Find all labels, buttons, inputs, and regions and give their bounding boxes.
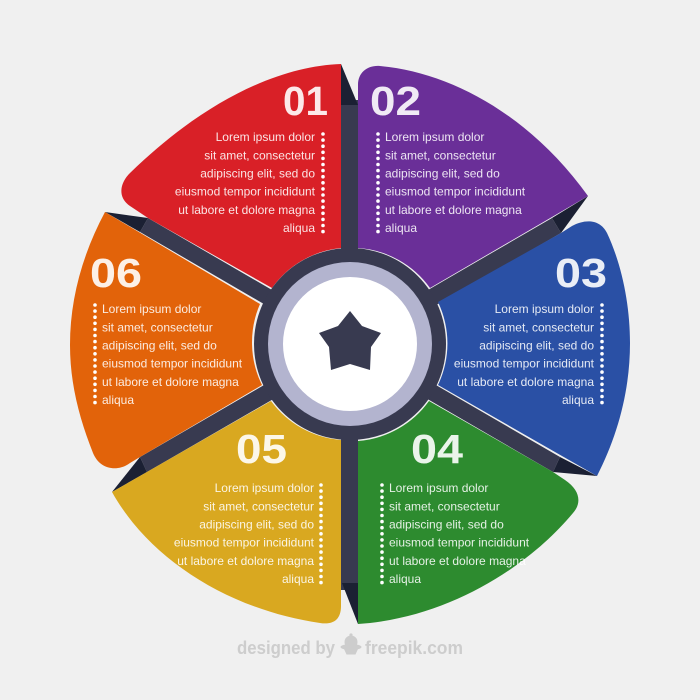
centre hub	[254, 248, 446, 440]
segment shape 02	[358, 66, 588, 288]
text block 06: aliqua	[102, 393, 134, 407]
text block 05: sit amet, consectetur	[203, 499, 314, 513]
text block 04: adipiscing elit, sed do	[389, 518, 504, 532]
text block 02: ut labore et dolore magna	[385, 203, 522, 217]
text block 05: aliqua	[282, 572, 314, 586]
dotted line 04	[380, 485, 384, 584]
segment shape 04	[358, 401, 578, 624]
footer: freepik credit: freepik.com	[365, 638, 463, 658]
text block 03: eiusmod tempor incididunt	[454, 357, 595, 371]
number 01: 01	[283, 78, 328, 124]
text block 05: ut labore et dolore magna	[177, 554, 314, 568]
text block 04: eiusmod tempor incididunt	[389, 536, 530, 550]
segment shape 03	[438, 221, 630, 476]
text block 06: sit amet, consectetur	[102, 320, 213, 334]
panel: 04 green	[358, 401, 578, 624]
text block 04: ut labore et dolore magna	[389, 554, 526, 568]
number 05: 05	[236, 426, 287, 472]
panel: 05 yellow	[112, 401, 341, 623]
text block 03: ut labore et dolore magna	[457, 375, 594, 389]
dotted line 06	[93, 305, 97, 404]
panel: 06 orange	[70, 212, 262, 468]
number 04: 04	[411, 426, 463, 472]
footer: freepik credit	[237, 633, 463, 658]
text block 03: sit amet, consectetur	[483, 320, 594, 334]
text block 04: sit amet, consectetur	[389, 499, 500, 513]
dotted line 01	[321, 134, 325, 233]
text block 06: Lorem ipsum dolor	[102, 302, 201, 316]
text block 03: Lorem ipsum dolor	[495, 302, 594, 316]
text block 05: adipiscing elit, sed do	[199, 518, 314, 532]
number 06: 06	[90, 250, 142, 296]
text block 04: aliqua	[389, 572, 421, 586]
text block 01: sit amet, consectetur	[204, 148, 315, 162]
segment shape 01	[121, 64, 341, 288]
icon: freepik mascot	[340, 633, 362, 654]
text block 04: Lorem ipsum dolor	[389, 481, 488, 495]
text block 01: Lorem ipsum dolor	[216, 130, 315, 144]
panel: 02 purple	[358, 66, 588, 288]
number 03: 03	[555, 250, 607, 296]
text block 06: adipiscing elit, sed do	[102, 338, 217, 352]
text block 02: adipiscing elit, sed do	[385, 166, 500, 180]
dotted line 02	[376, 134, 380, 233]
segment shape 06	[70, 212, 262, 468]
text block 03: aliqua	[562, 393, 594, 407]
dotted line 03	[600, 305, 604, 404]
text block 01: eiusmod tempor incididunt	[175, 185, 316, 199]
text block 02: sit amet, consectetur	[385, 148, 496, 162]
text block 05: eiusmod tempor incididunt	[174, 536, 315, 550]
number 02: 02	[370, 78, 421, 124]
panel: 03 blue	[438, 221, 630, 476]
segment shape 05	[112, 401, 341, 623]
text block 01: ut labore et dolore magna	[178, 203, 315, 217]
text block 05: Lorem ipsum dolor	[215, 481, 314, 495]
text block 06: eiusmod tempor incididunt	[102, 357, 243, 371]
dotted line 05	[319, 485, 323, 584]
text block 01: adipiscing elit, sed do	[200, 166, 315, 180]
text block 02: aliqua	[385, 221, 417, 235]
panel: 01 red	[121, 64, 341, 288]
footer: freepik credit: designed by	[237, 638, 335, 658]
spokes: dark bars between segments	[105, 64, 597, 624]
text block 02: eiusmod tempor incididunt	[385, 185, 526, 199]
text block 02: Lorem ipsum dolor	[385, 130, 484, 144]
icon: star	[319, 311, 381, 370]
text block 01: aliqua	[283, 221, 315, 235]
text block 06: ut labore et dolore magna	[102, 375, 239, 389]
text block 03: adipiscing elit, sed do	[479, 338, 594, 352]
